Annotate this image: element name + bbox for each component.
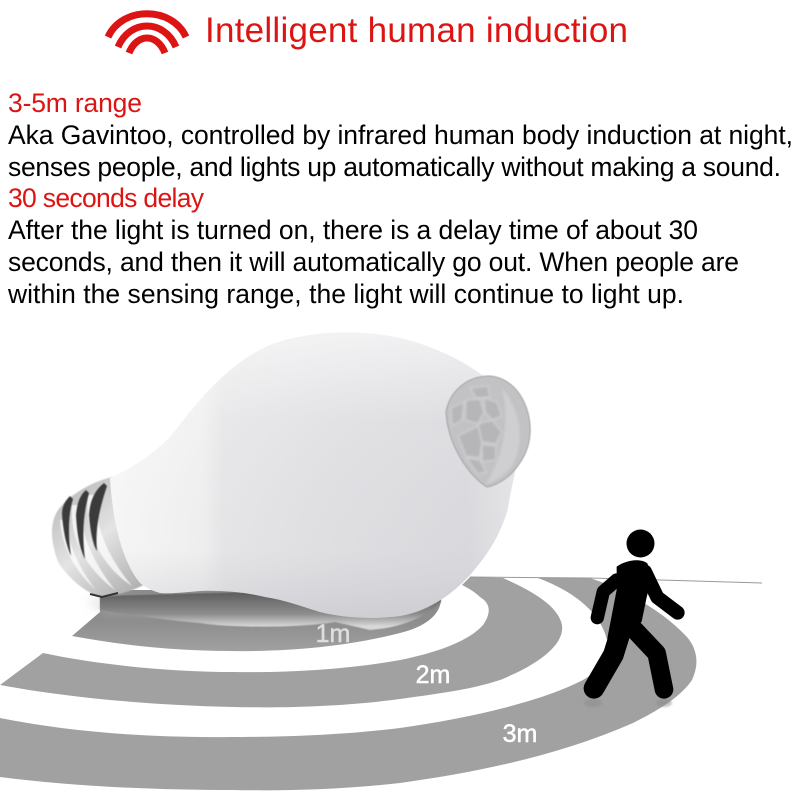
band: 3m bbox=[0, 578, 696, 790]
text block: description: 3-5m range bbox=[8, 88, 142, 118]
band: 2m bbox=[0, 577, 562, 707]
band: 1m bbox=[72, 590, 441, 651]
walking person bbox=[584, 530, 678, 707]
body bbox=[594, 560, 678, 689]
title: Intelligent human induction bbox=[205, 11, 628, 50]
bulb shadow bbox=[86, 590, 441, 630]
text block: description: senses people, and lights up automatically without making a sound. bbox=[8, 152, 781, 182]
floor horizon line bbox=[470, 577, 762, 583]
distance labels: 1m bbox=[316, 620, 350, 648]
icon: red signal waves bbox=[108, 14, 186, 53]
text block: description bbox=[7, 88, 793, 309]
distance labels: 2m bbox=[416, 661, 450, 689]
PIR sensor dome bbox=[446, 376, 530, 487]
text block: description: within the sensing range, the light will continue to light up. bbox=[7, 279, 684, 309]
floor distance bands bbox=[0, 577, 696, 790]
head bbox=[626, 530, 654, 558]
distance labels: 3m bbox=[503, 720, 537, 748]
text block: description: seconds, and then it will automatically go out. When people are bbox=[8, 247, 739, 277]
foot shadows bbox=[584, 699, 672, 707]
screw base bbox=[52, 477, 150, 597]
distance labels bbox=[316, 620, 537, 748]
glass globe bbox=[110, 333, 516, 618]
text block: description: Aka Gavintoo, controlled by infrared human body induction at night, bbox=[8, 120, 793, 150]
bulb bbox=[52, 333, 530, 618]
text block: description: After the light is turned on, there is a delay time of about 30 bbox=[8, 215, 698, 245]
text block: description: 30 seconds delay bbox=[8, 183, 205, 213]
